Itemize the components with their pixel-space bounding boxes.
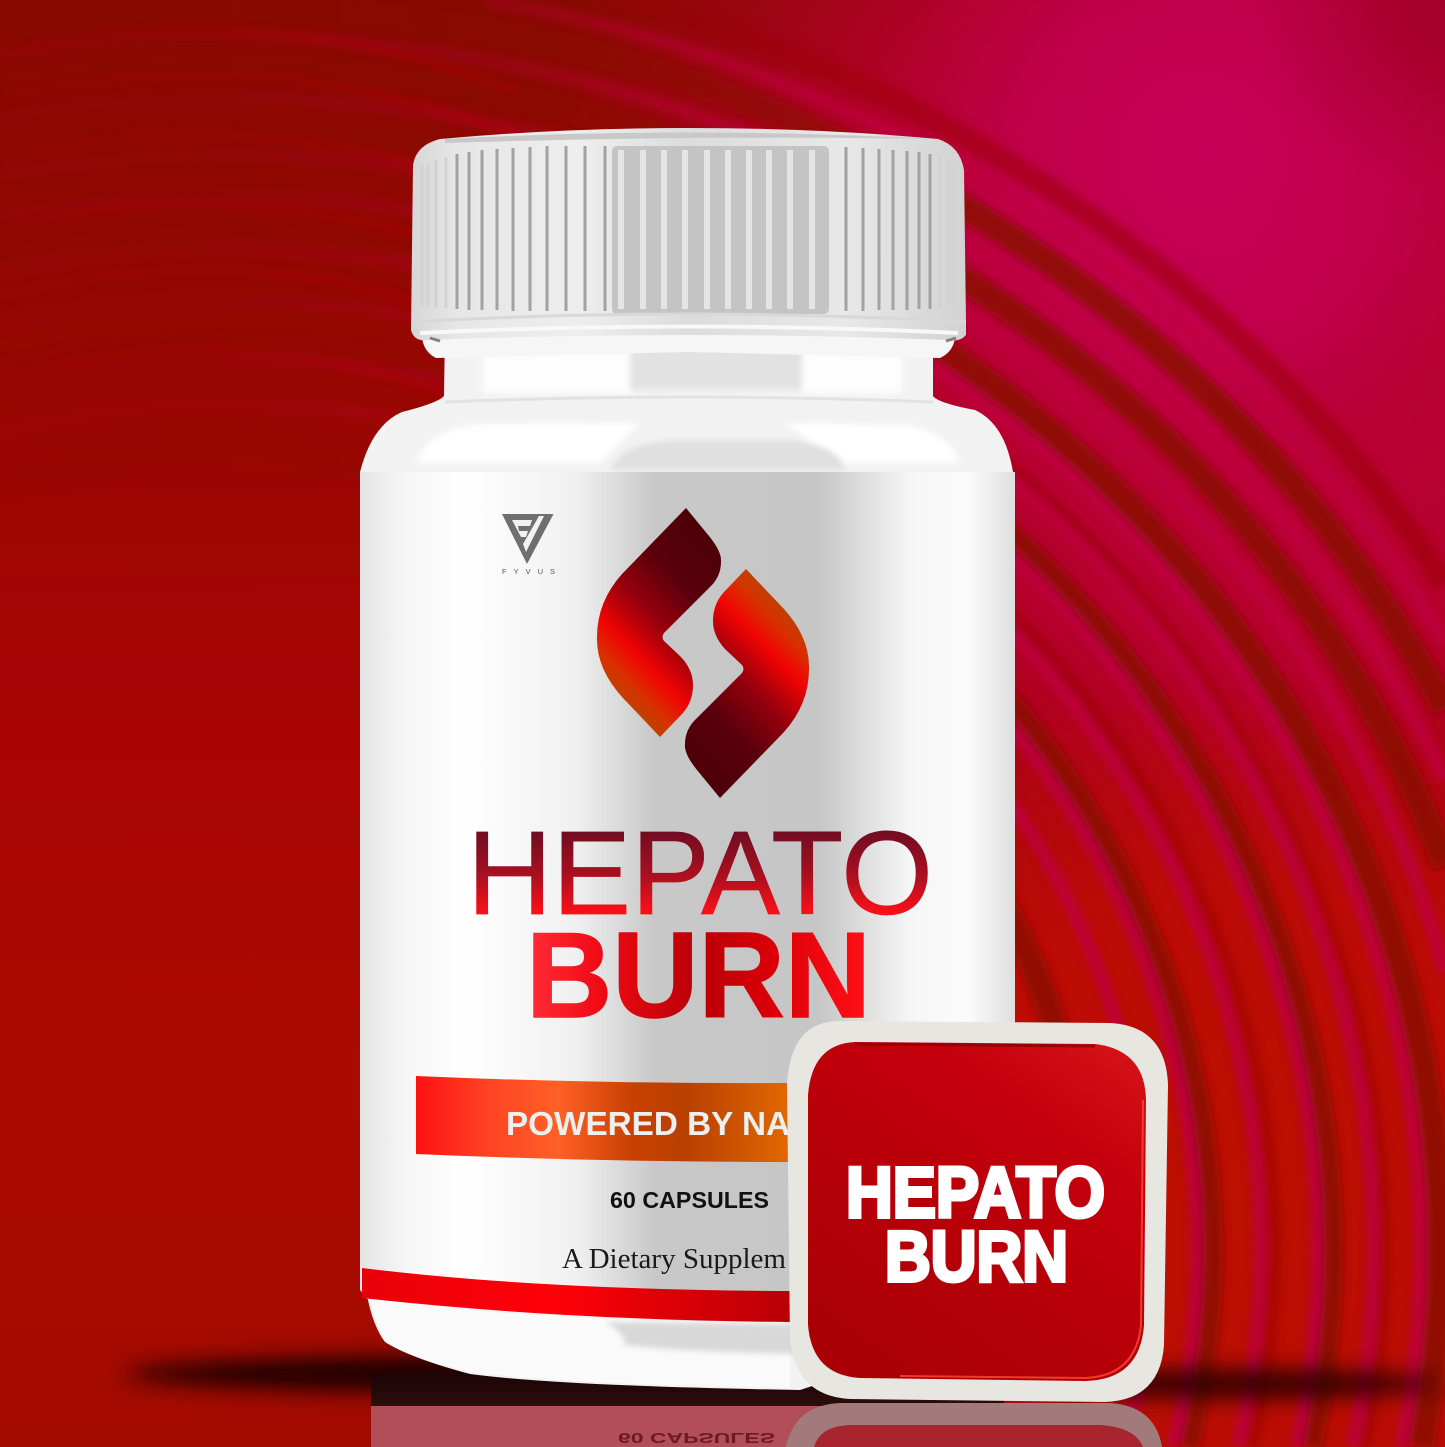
floor shadow [125, 1353, 1440, 1399]
bottle label [360, 472, 1015, 1388]
bottle cap [411, 128, 966, 341]
orange tagline band [416, 1076, 790, 1162]
floor reflection [371, 1373, 1162, 1447]
bottle body base and shoulders [360, 330, 1015, 1390]
product name: HEPATO: HEPATO [467, 807, 933, 940]
red stripe [362, 1268, 790, 1322]
orange tagline band: POWERED BY NA [506, 1105, 790, 1142]
brand mark: FYVUS: FYVUS [502, 567, 555, 576]
case shell [787, 1021, 1168, 1402]
cap ribs [457, 146, 930, 311]
bottle base highlight [370, 1298, 790, 1388]
flame S logo [597, 508, 809, 798]
case label: HEPATO: HEPATO [846, 1154, 1105, 1233]
neck ring [422, 330, 955, 358]
pill case [787, 1021, 1168, 1402]
case lid [808, 1042, 1146, 1381]
case label: BURN: BURN [885, 1218, 1068, 1297]
product name: BURN: BURN [526, 907, 871, 1043]
product bottle [360, 128, 1015, 1390]
dietary supplement line: A Dietary Supplem [562, 1243, 786, 1275]
reflected capsule count: 60 CAPSULES [618, 1430, 775, 1447]
brand mark: FYVUS [502, 514, 555, 576]
capsule count: 60 CAPSULES [610, 1187, 769, 1213]
reflected pill case [786, 1403, 1162, 1447]
